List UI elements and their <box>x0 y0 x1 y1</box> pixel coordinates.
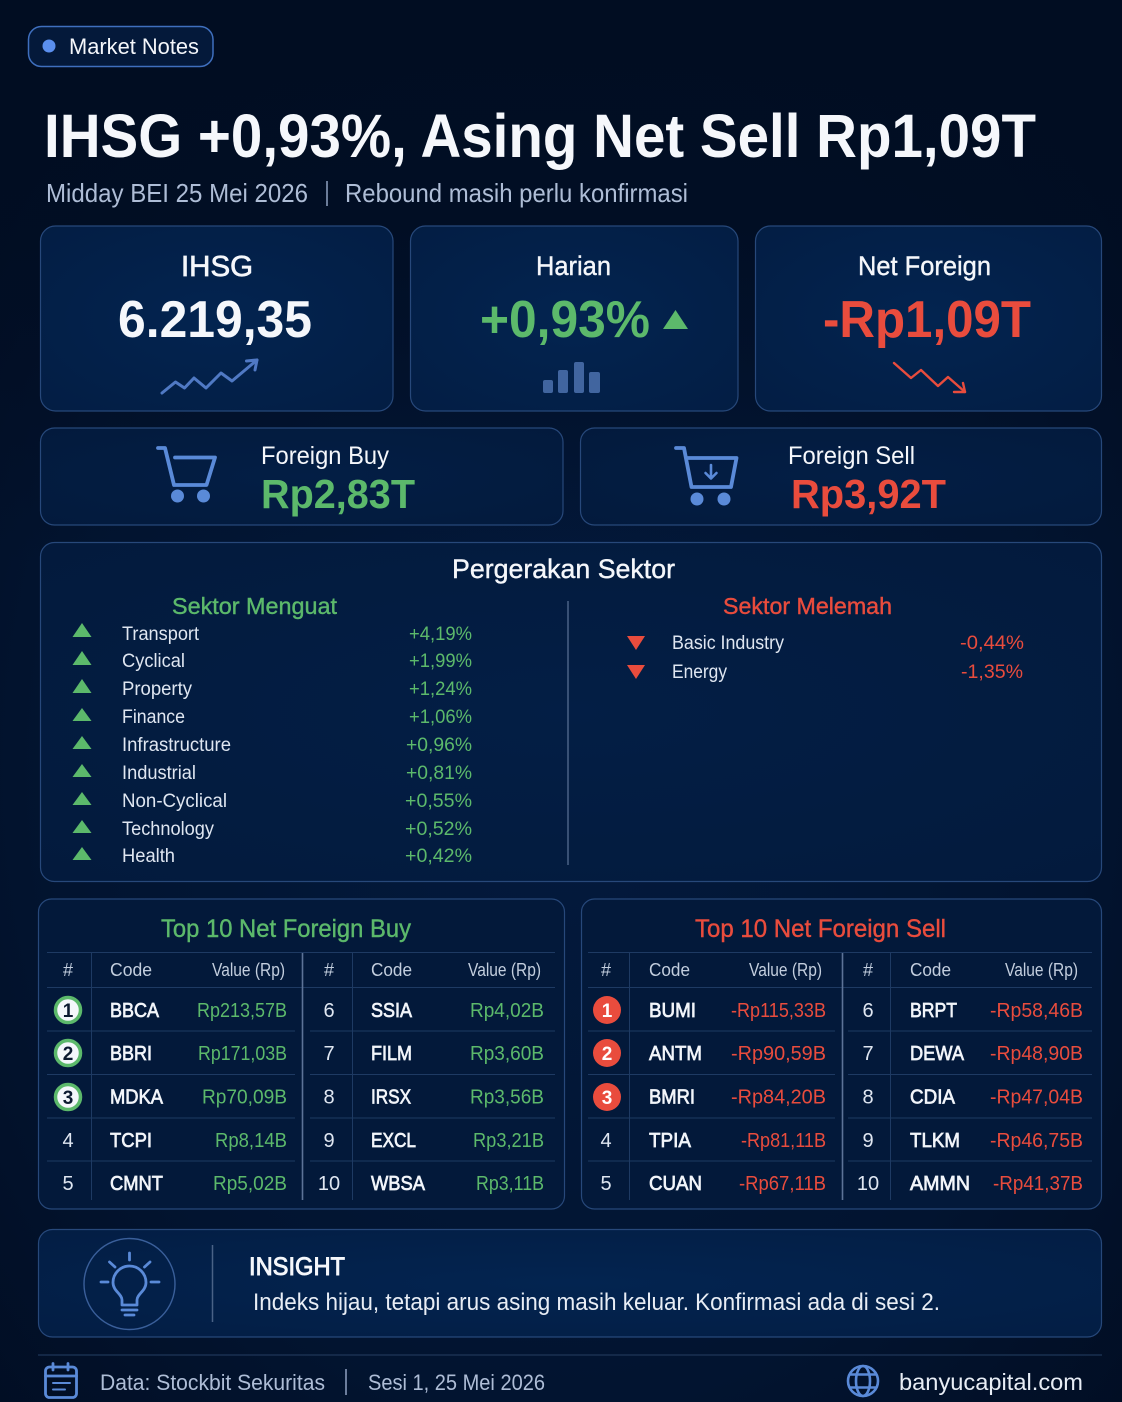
panel: Net Foreign <box>756 226 1102 411</box>
list: Sektor Menguat <box>72 593 472 867</box>
subtitle <box>46 178 688 208</box>
table rows: Rp171,03B <box>198 1043 287 1065</box>
table rows: 4 <box>600 1130 612 1152</box>
table rows: BBRI <box>110 1043 152 1065</box>
table rows: BMRI <box>649 1086 695 1108</box>
table header: Value (Rp) <box>468 960 541 980</box>
footer: source: Data: Stockbit Sekuritas <box>100 1370 325 1395</box>
table rows: Rp3,56B <box>470 1086 544 1108</box>
panel: IHSG: IHSG <box>181 251 253 283</box>
table rows: TPIA <box>649 1130 692 1152</box>
table rows: 8 <box>323 1086 335 1108</box>
heading: INSIGHT: INSIGHT <box>249 1253 345 1281</box>
panel: Top 10 Net Foreign Sell <box>582 899 1102 1209</box>
subtitle: Midday BEI 25 Mei 2026 <box>46 178 308 208</box>
panel: Foreign Buy <box>40 428 563 525</box>
table rows: WBSA <box>371 1173 426 1195</box>
table rows: -Rp58,46B <box>990 1000 1083 1022</box>
table rows: -Rp115,33B <box>731 1000 826 1022</box>
rank badges: 1 <box>63 1001 74 1022</box>
table rows: Rp5,02B <box>213 1173 287 1195</box>
table header: Value (Rp) <box>1005 960 1078 980</box>
table rows: CMNT <box>110 1173 163 1195</box>
badge: Market Notes <box>28 26 213 66</box>
table header <box>63 960 541 980</box>
panel: Harian: Harian <box>536 251 611 281</box>
panel: Net Foreign: Net Foreign <box>858 251 991 281</box>
list: Sektor Menguat: Health <box>122 846 175 867</box>
panel: Foreign Sell: Foreign Sell <box>788 442 915 470</box>
table rows: EXCL <box>371 1130 416 1152</box>
table header: # <box>63 960 73 980</box>
table rows: SSIA <box>371 1000 413 1022</box>
footer: website <box>848 1366 1083 1396</box>
icon: up triangle <box>663 310 688 329</box>
panel: Harian: +0,93% <box>480 291 650 349</box>
icon: bars <box>543 362 600 393</box>
table rows: Rp70,09B <box>202 1086 287 1108</box>
panel: Foreign Sell <box>580 428 1102 525</box>
subtitle: Rebound masih perlu konfirmasi <box>345 178 688 208</box>
table rows: 7 <box>862 1043 874 1065</box>
list: Sektor Menguat: Finance <box>122 707 185 728</box>
list: Sektor Menguat: Property <box>122 679 192 700</box>
list: Sektor Menguat: +0,52% <box>405 819 472 840</box>
table rows: MDKA <box>110 1086 164 1108</box>
table rows: Rp3,21B <box>473 1130 544 1152</box>
table rows: BBCA <box>110 1000 160 1022</box>
table rows: Rp8,14B <box>215 1130 287 1152</box>
table rows: BRPT <box>910 1000 957 1022</box>
heading: Pergerakan Sektor: Pergerakan Sektor <box>452 554 675 584</box>
list: Sektor Melemah: Sektor Melemah <box>723 593 892 619</box>
table rows: CUAN <box>649 1173 702 1195</box>
panel: Pergerakan Sektor <box>40 542 1102 882</box>
table header: # <box>601 960 611 980</box>
table header: # <box>324 960 334 980</box>
icon: light bulb <box>84 1238 175 1330</box>
table rows: 7 <box>323 1043 335 1065</box>
table rows: 5 <box>62 1173 74 1195</box>
list: Sektor Menguat: +0,81% <box>406 763 472 784</box>
rank badges <box>56 998 80 1110</box>
table rows: 4 <box>62 1130 74 1152</box>
badge: Market Notes: Market Notes <box>69 34 199 59</box>
icon: globe <box>848 1366 878 1396</box>
list: Sektor Menguat: Technology <box>122 819 214 840</box>
table header <box>601 960 1078 980</box>
list: Sektor Melemah: -1,35% <box>961 662 1023 683</box>
list: Sektor Menguat: Transport <box>122 624 200 645</box>
list: Sektor Menguat: Non-Cyclical <box>122 791 227 812</box>
icon: falling line chart <box>894 363 965 392</box>
footer: source <box>46 1364 545 1398</box>
heading: Top 10 Net Foreign Sell <box>695 915 946 943</box>
list: Sektor Melemah: Energy <box>672 662 727 683</box>
icon: cart <box>158 448 215 502</box>
panel: Net Foreign: -Rp1,09T <box>823 291 1031 349</box>
table rows: 10 <box>318 1173 340 1195</box>
table rows: -Rp67,11B <box>739 1173 826 1195</box>
list: Sektor Menguat: +1,24% <box>409 679 472 700</box>
table rows: 5 <box>600 1173 612 1195</box>
table header: Code <box>910 960 951 980</box>
table rows: Rp3,60B <box>470 1043 544 1065</box>
table rows: Rp3,11B <box>476 1173 544 1195</box>
table header: Value (Rp) <box>749 960 822 980</box>
table rows: 9 <box>862 1130 874 1152</box>
list: Sektor Melemah <box>627 593 1024 683</box>
icon: cart with down arrow <box>676 448 736 506</box>
rank badges: 3 <box>602 1088 612 1109</box>
table rows: ANTM <box>649 1043 702 1065</box>
list: Sektor Menguat: Sektor Menguat <box>172 593 338 619</box>
insight text: Indeks hijau, tetapi arus asing masih keluar. Konfirmasi ada di sesi 2. <box>253 1289 940 1316</box>
table rows: FILM <box>371 1043 412 1065</box>
table rows <box>62 1000 544 1195</box>
list: Sektor Melemah: Basic Industry <box>672 633 784 654</box>
table rows: -Rp81,11B <box>741 1130 826 1152</box>
table rows: 6 <box>862 1000 874 1022</box>
table rows: IRSX <box>371 1086 411 1108</box>
table rows: 9 <box>323 1130 335 1152</box>
table rows: 8 <box>862 1086 874 1108</box>
list: Sektor Menguat: +1,06% <box>409 707 472 728</box>
list: Sektor Melemah: -0,44% <box>960 633 1024 654</box>
table rows: -Rp46,75B <box>990 1130 1083 1152</box>
table header: Value (Rp) <box>212 960 285 980</box>
table header: Code <box>371 960 412 980</box>
list: Sektor Menguat: +0,42% <box>405 846 472 867</box>
panel: Harian <box>410 226 738 411</box>
table rows: -Rp47,04B <box>990 1086 1083 1108</box>
table rows: TCPI <box>110 1130 152 1152</box>
rank badges: 1 <box>602 1001 613 1022</box>
rank badges <box>593 996 621 1111</box>
icon: calendar <box>46 1364 76 1398</box>
table header: Code <box>649 960 690 980</box>
heading: Top 10 Net Foreign Buy <box>161 915 411 943</box>
table rows: Rp213,57B <box>197 1000 287 1022</box>
list: Sektor Menguat: +1,99% <box>409 651 472 672</box>
rank badges: 2 <box>63 1044 73 1065</box>
table rows: -Rp84,20B <box>731 1086 826 1108</box>
table header: Code <box>110 960 152 980</box>
list: Sektor Menguat: Infrastructure <box>122 735 231 756</box>
icon: rising line chart <box>162 360 257 393</box>
rank badges: 3 <box>63 1088 73 1109</box>
panel: Foreign Buy: Rp2,83T <box>261 471 415 517</box>
list: Sektor Menguat: +0,55% <box>405 791 472 812</box>
table rows: TLKM <box>910 1130 960 1152</box>
table rows: 10 <box>857 1173 879 1195</box>
table rows <box>600 1000 1083 1195</box>
rank badges: 2 <box>602 1044 612 1065</box>
list: Sektor Menguat: +4,19% <box>409 624 472 645</box>
table rows: AMMN <box>910 1173 970 1195</box>
table rows: CDIA <box>910 1086 956 1108</box>
footer: source: Sesi 1, 25 Mei 2026 <box>368 1370 545 1395</box>
table header: # <box>863 960 873 980</box>
list: Sektor Menguat: +0,96% <box>406 735 472 756</box>
table rows: -Rp48,90B <box>990 1043 1083 1065</box>
footer: website: banyucapital.com <box>899 1369 1083 1395</box>
table rows: -Rp90,59B <box>731 1043 826 1065</box>
table rows: BUMI <box>649 1000 696 1022</box>
table rows: 6 <box>323 1000 335 1022</box>
list: Sektor Menguat: Industrial <box>122 763 196 784</box>
panel: Insight <box>38 1230 1102 1337</box>
list: Sektor Menguat: Cyclical <box>122 651 185 672</box>
panel: Foreign Buy: Foreign Buy <box>261 442 389 470</box>
panel: IHSG: 6.219,35 <box>118 291 312 349</box>
panel: IHSG <box>40 226 393 411</box>
table rows: DEWA <box>910 1043 965 1065</box>
table rows: -Rp41,37B <box>993 1173 1083 1195</box>
title: IHSG +0,93%, Asing Net Sell Rp1,09T <box>44 102 1036 170</box>
table rows: Rp4,02B <box>470 1000 544 1022</box>
panel: Foreign Sell: Rp3,92T <box>791 471 946 517</box>
panel: Top 10 Net Foreign Buy <box>38 899 564 1209</box>
